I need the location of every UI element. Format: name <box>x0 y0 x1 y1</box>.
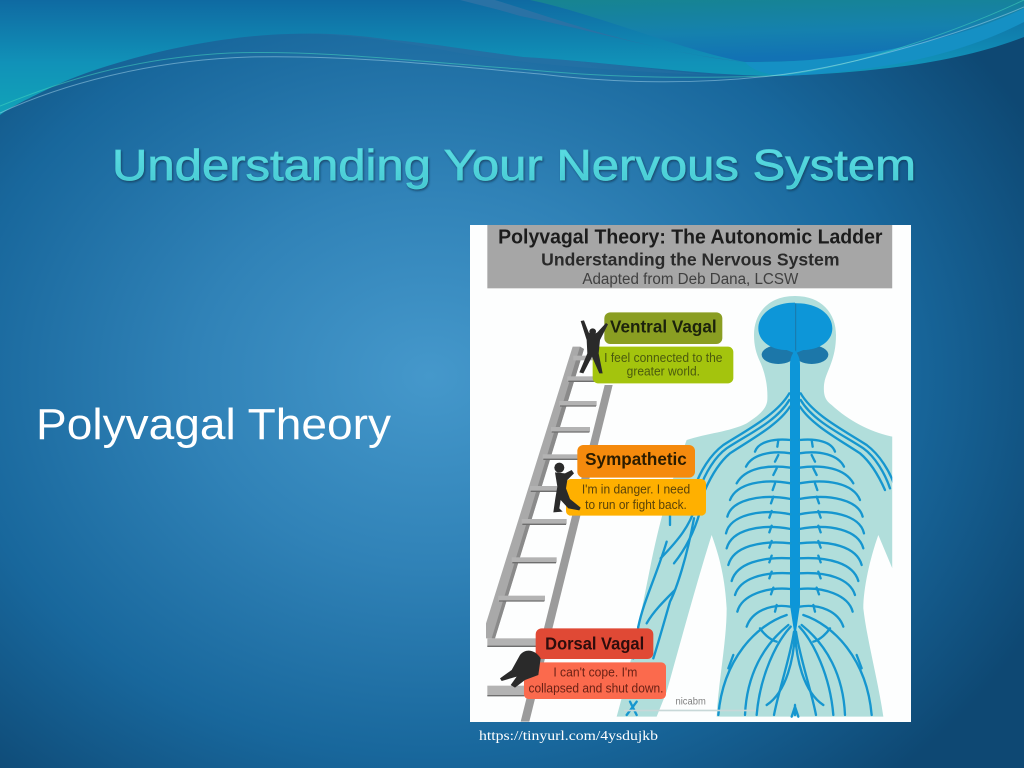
icon: person climbing <box>553 463 581 512</box>
source link: https://tinyurl.com/4ysdujkb <box>479 729 658 744</box>
title: Understanding Your Nervous System <box>112 141 916 190</box>
callout: sympathetic: I'm in danger. I need <box>582 482 690 497</box>
callout: dorsal vagal <box>524 628 666 699</box>
callout: ventral vagal: I feel connected to the <box>604 350 722 365</box>
logo: nicabm <box>624 696 756 711</box>
icon: person collapsed <box>500 651 541 688</box>
logo: nicabm: nicabm <box>675 696 706 707</box>
body silhouette <box>617 296 892 717</box>
callout: ventral vagal: greater world. <box>627 364 700 379</box>
ladder <box>486 347 613 722</box>
subtitle text: Polyvagal Theory: Polyvagal Theory <box>36 400 391 449</box>
infographic image panel: autonomic ladder <box>470 225 911 722</box>
callout: dorsal vagal: collapsed and shut down. <box>528 680 663 695</box>
header band: Adapted from Deb Dana, LCSW <box>582 271 799 288</box>
header band: Understanding the Nervous System <box>541 250 839 270</box>
callout: sympathetic: to run or fight back. <box>585 497 687 512</box>
nerves <box>627 393 895 717</box>
icon: person with raised arms <box>579 320 608 373</box>
header band: Polyvagal Theory: The Autonomic Ladder <box>498 227 883 249</box>
callout: sympathetic: Sympathetic <box>585 449 687 469</box>
callout: dorsal vagal: I can't cope. I'm <box>553 665 637 680</box>
callout: ventral vagal: Ventral Vagal <box>610 316 717 336</box>
callout: sympathetic <box>566 445 706 516</box>
brain <box>758 303 832 364</box>
callout: ventral vagal <box>593 312 733 383</box>
spinal cord <box>790 350 800 632</box>
callout: dorsal vagal: Dorsal Vagal <box>545 633 644 653</box>
header band <box>487 225 892 288</box>
top wave banner <box>0 0 1024 115</box>
